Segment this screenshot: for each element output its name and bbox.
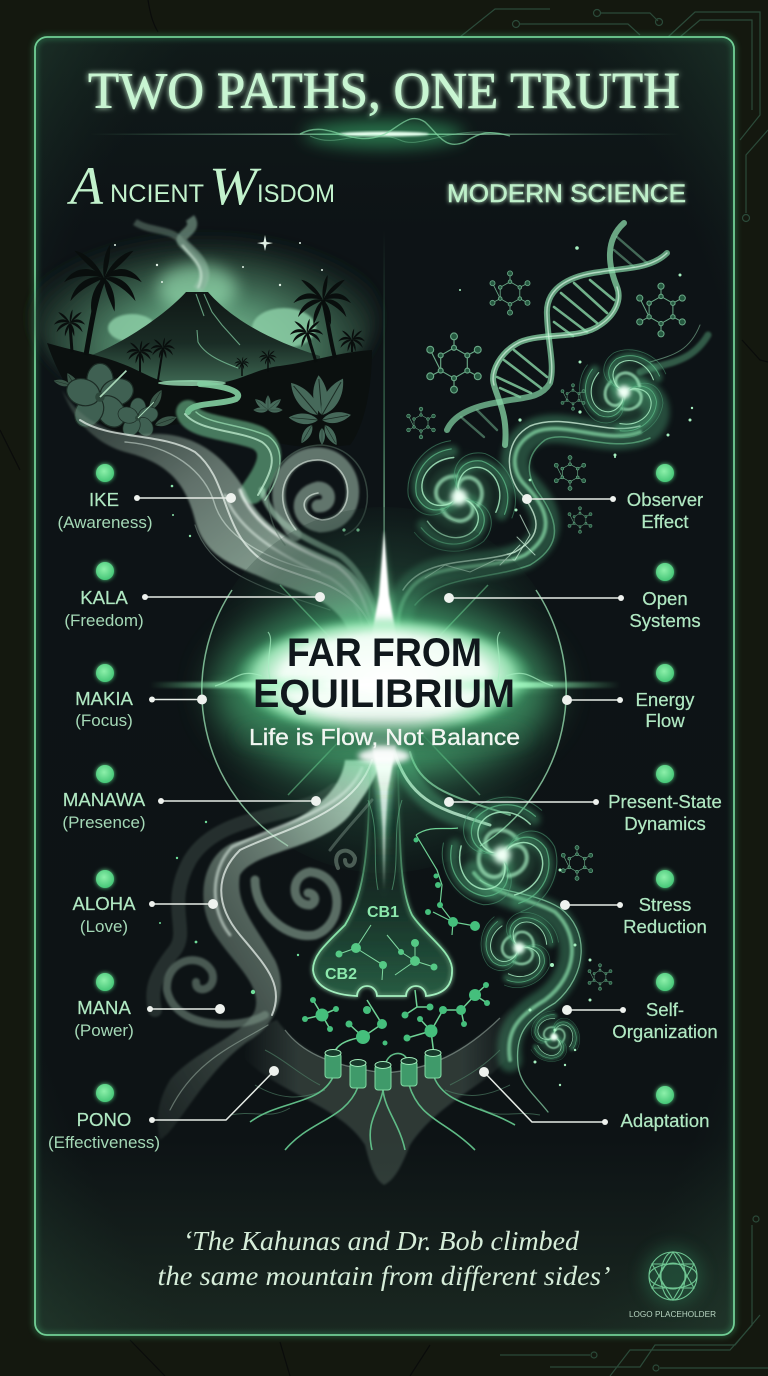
molecules: upper right: [407, 271, 685, 533]
vein network: [425, 515, 535, 578]
heading: ancient wisdom: NCIENT: [110, 180, 204, 208]
heading: ancient wisdom: ISDOM: [257, 180, 335, 208]
closing quote: the same mountain from different sides’: [158, 1261, 611, 1291]
item: adaptation: Adaptation: [621, 1110, 709, 1131]
item: observer effect: [522, 464, 703, 532]
item: MANA: [74, 973, 225, 1040]
item: MANAWA: [62, 765, 321, 832]
logo placeholder: LOGO PLACEHOLDER: [629, 1309, 716, 1319]
item: present-state dynamics: Present-State: [608, 791, 722, 812]
closing quote: ‘The Kahunas and Dr. Bob climbed: [183, 1226, 580, 1256]
center text: far from equilibrium: FAR FROM: [287, 631, 482, 675]
item: present-state dynamics: [444, 765, 722, 834]
swirl: galaxy lower-right large: [423, 759, 606, 940]
circuit traces: bottom right: [500, 1216, 768, 1376]
root band: [230, 1007, 540, 1185]
mountain: [78, 292, 320, 385]
logo placeholder: [629, 1246, 716, 1319]
center text: far from equilibrium: [253, 631, 515, 716]
item: MANA: MANA: [77, 997, 131, 1018]
item: open systems: Systems: [629, 610, 701, 631]
item: IKE: [57, 464, 236, 532]
title: TWO PATHS, ONE TRUTH: [88, 63, 680, 120]
item: PONO: [48, 1066, 279, 1152]
item: MAKIA: (Focus): [75, 711, 133, 730]
item: MAKIA: MAKIA: [75, 688, 134, 709]
title divider wave: [90, 119, 680, 148]
item: energy flow: Flow: [645, 710, 685, 731]
central halo ring: [201, 507, 567, 873]
item: energy flow: [562, 664, 695, 731]
item: self-organization: [562, 973, 718, 1042]
center subtitle: Life is Flow, Not Balance: [249, 724, 520, 750]
swirl: lower-left large: [167, 960, 265, 1024]
item: open systems: [444, 563, 701, 631]
upper-left energy flows: [62, 390, 380, 630]
item: PONO: PONO: [77, 1109, 131, 1130]
item: IKE: IKE: [89, 489, 119, 510]
central flare: [150, 525, 620, 905]
item: KALA: [64, 562, 325, 630]
item: present-state dynamics: Dynamics: [624, 813, 706, 834]
item: open systems: Open: [642, 588, 688, 609]
item: MANAWA: (Presence): [62, 813, 146, 832]
bulb interior network: [336, 925, 438, 980]
right items: [444, 464, 722, 1131]
swirl: upper-left: [269, 445, 367, 545]
item: ALOHA: ALOHA: [72, 893, 136, 914]
volcano smoke: [135, 218, 204, 290]
center text: far from equilibrium: EQUILIBRIUM: [253, 672, 515, 716]
label CB2: CB2: [325, 966, 357, 983]
neuron synapse bulb: [313, 770, 452, 996]
heading: modern science: MODERN SCIENCE: [447, 180, 686, 208]
item: adaptation: [479, 1067, 709, 1131]
swirl: galaxy lower-right medium: [454, 876, 580, 1002]
tropical foliage: [253, 375, 352, 447]
lower-right energy flows: [394, 750, 612, 1112]
closing quote: [158, 1226, 611, 1291]
item: IKE: (Awareness): [57, 513, 153, 532]
item: MAKIA: [75, 664, 207, 730]
lower-left energy flows: [153, 760, 382, 1140]
item: stress reduction: [560, 870, 707, 937]
item: ALOHA: (Love): [80, 917, 128, 936]
item: stress reduction: Stress: [639, 894, 691, 915]
item: MANAWA: MANAWA: [63, 789, 146, 810]
illustration: DNA helix: [447, 223, 667, 445]
left items: [48, 464, 325, 1152]
clouds: [108, 308, 316, 348]
swirl: lower-left small: [255, 872, 337, 936]
item: MANA: (Power): [74, 1021, 134, 1040]
land silhouette: [47, 343, 372, 447]
heading: ancient wisdom: W: [209, 156, 262, 216]
item: KALA: (Freedom): [64, 611, 144, 630]
item: ALOHA: [72, 870, 218, 936]
heading: ancient wisdom: A: [67, 156, 104, 216]
palms: [54, 244, 365, 380]
circuit traces: top right: [460, 9, 768, 222]
upper-right S-shaped energy band: [381, 246, 708, 630]
receptors and roots: [250, 1050, 515, 1150]
DNA rungs: [497, 280, 614, 397]
lagoon river: [158, 380, 280, 500]
item: observer effect: Effect: [641, 511, 689, 532]
item: self-organization: Self-: [646, 999, 684, 1020]
item: KALA: KALA: [80, 587, 128, 608]
swirl: galaxy lower-right small: [520, 1004, 594, 1080]
item: stress reduction: Reduction: [623, 916, 707, 937]
item: energy flow: Energy: [636, 689, 695, 710]
tropical flowers: [53, 363, 178, 439]
item: observer effect: Observer: [627, 489, 703, 510]
item: self-organization: Organization: [612, 1021, 718, 1042]
item: PONO: (Effectiveness): [48, 1133, 160, 1152]
heading: ancient wisdom: [67, 156, 335, 216]
illustration: island volcano: [33, 217, 377, 500]
stars: [114, 235, 323, 286]
central divider line: [383, 230, 385, 610]
swirl: galaxy central-right: [381, 404, 545, 565]
free molecules: [302, 828, 490, 1058]
swirl: galaxy upper-right: [552, 315, 686, 451]
label CB1: CB1: [367, 904, 399, 921]
